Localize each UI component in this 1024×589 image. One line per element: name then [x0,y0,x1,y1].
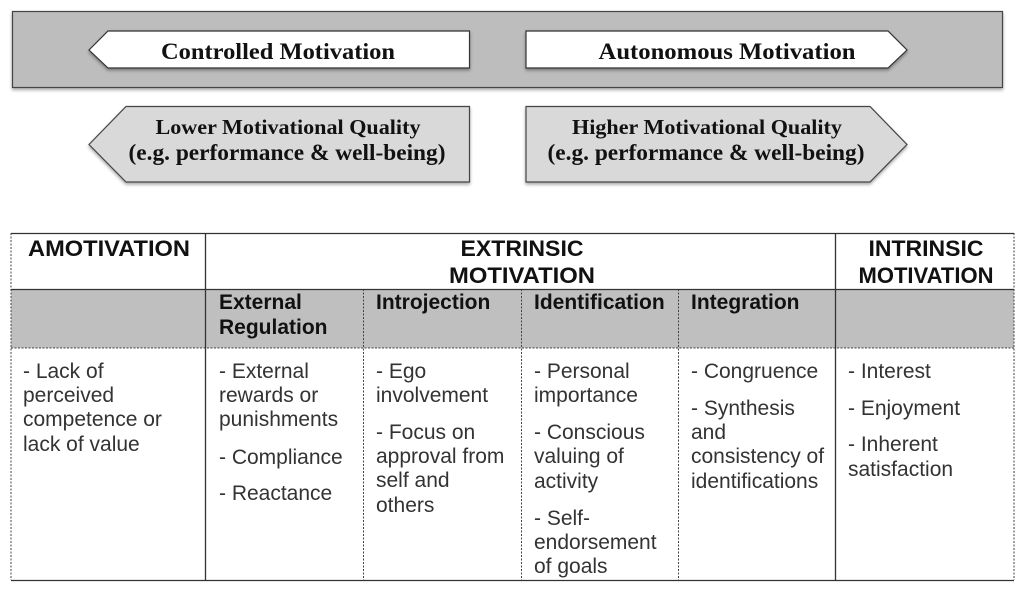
text: identification details: importance [534,384,638,407]
text: external regulation details [219,360,343,505]
text: identification details: endorsement [534,531,657,554]
text: amotivation details: - Lack of [23,360,104,383]
subheading: external regulation: Regulation [219,316,328,339]
text: external regulation details: rewards or [219,384,318,407]
text: identification details: valuing of [534,445,624,468]
text: amotivation details: competence or [23,408,162,431]
text: external regulation details: - Reactance [219,482,332,505]
text: intrinsic motivation details: satisfaction [848,458,953,481]
table [11,233,1014,580]
text: intrinsic motivation details: - Interest [848,360,931,383]
text: integration details: - Synthesis [691,397,795,420]
text: integration details: - Congruence [691,360,818,383]
subheading: introjection: Introjection [376,291,490,314]
column heading: intrinsic motivation: INTRINSIC [868,236,984,261]
text: identification details: - Conscious [534,421,645,444]
text: introjection details: involvement [376,384,488,407]
text: introjection details: approval from [376,445,504,468]
text: identification details: of goals [534,555,608,578]
text: integration details: identifications [691,470,818,493]
arrow: lower motivational quality: (e.g. performance & well-being) [128,140,446,165]
column heading: intrinsic motivation [858,236,994,288]
text: amotivation details: perceived [23,384,114,407]
column heading: intrinsic motivation: MOTIVATION [858,263,994,288]
arrow: higher motivational quality: (e.g. performance & well-being) [548,140,864,165]
arrow: controlled motivation: Controlled Motivation [161,39,395,65]
arrow: lower motivational quality: Lower Motivational Quality [156,115,421,139]
subheading: external regulation: External [219,291,302,314]
text: identification details: activity [534,470,599,493]
text: amotivation details: lack of value [23,433,140,456]
text: integration details: and [691,421,726,444]
arrow: autonomous motivation: Autonomous Motivation [598,39,856,65]
arrow: autonomous motivation [526,31,907,68]
text: introjection details: - Ego [376,360,426,383]
arrow: lower motivational quality [89,106,470,182]
subheading: identification: Identification [534,291,665,314]
text: intrinsic motivation details: - Enjoyment [848,397,960,420]
text: external regulation details: punishments [219,408,338,431]
text: introjection details: others [376,494,434,517]
text: integration details: consistency of [691,445,824,468]
text: introjection details: self and [376,469,450,492]
column heading: amotivation: AMOTIVATION [28,236,190,261]
text: intrinsic motivation details: - Inherent [848,433,938,456]
top band [12,12,1002,88]
text: identification details: - Personal [534,360,630,383]
subheading: integration: Integration [691,291,800,314]
column heading: extrinsic motivation: EXTRINSIC [460,236,584,261]
text: intrinsic motivation details [848,360,960,481]
arrow: higher motivational quality [526,106,907,182]
text: introjection details: - Focus on [376,421,475,444]
arrow: higher motivational quality: Higher Motivational Quality [572,115,842,139]
text: integration details [691,360,824,493]
text: external regulation details: - External [219,360,309,383]
column heading: extrinsic motivation [449,236,595,288]
text: identification details [534,360,657,578]
text: external regulation details: - Compliance [219,446,343,469]
text: introjection details [376,360,504,517]
subheading: external regulation [219,291,328,339]
text: identification details: - Self- [534,507,590,530]
text: amotivation details [23,360,162,456]
arrow: controlled motivation [89,31,470,68]
column heading: extrinsic motivation: MOTIVATION [449,263,595,288]
